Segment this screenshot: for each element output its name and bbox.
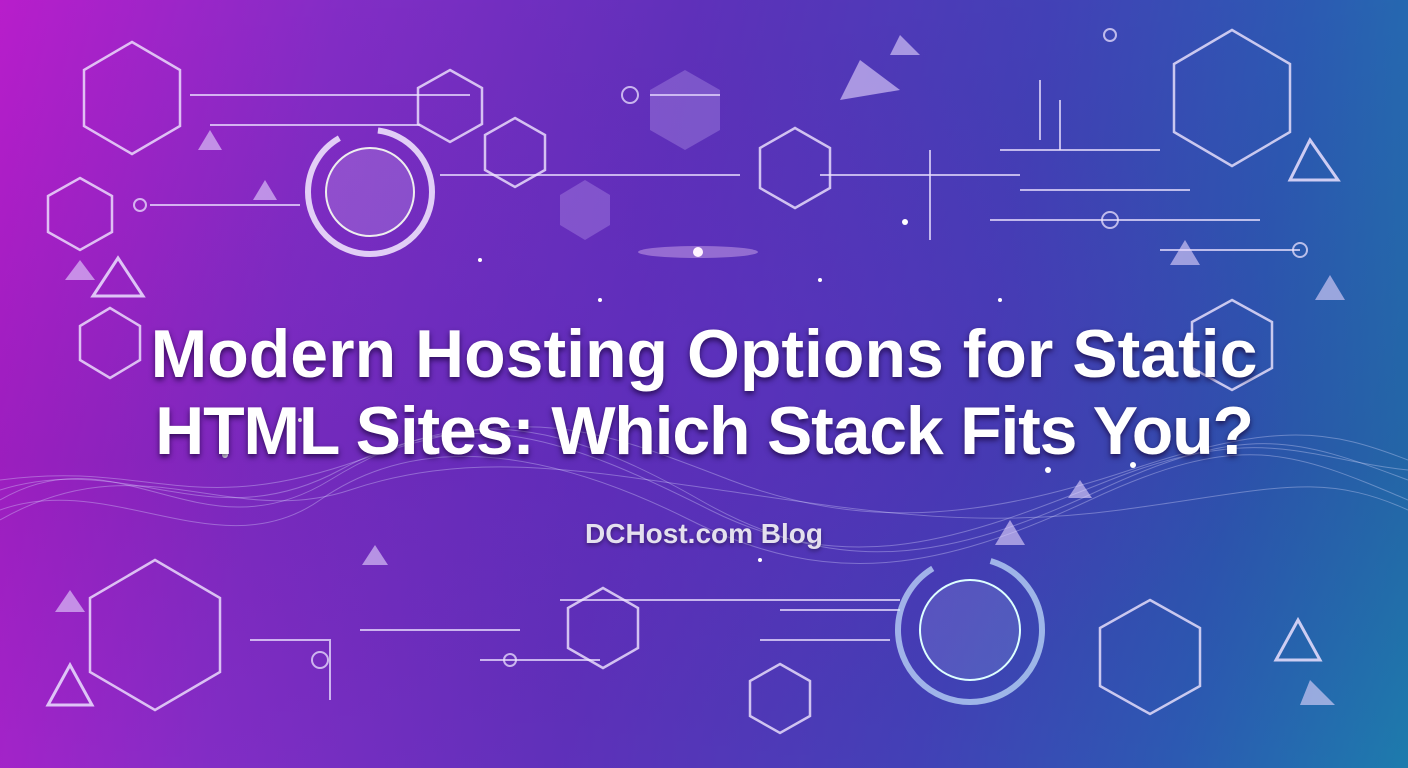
triangles: [55, 35, 1345, 705]
title: Modern Hosting Options for Static: [151, 316, 1257, 392]
circuit lines: [134, 29, 1307, 700]
wave band: [0, 427, 1408, 564]
title: [151, 316, 1258, 469]
rings: [308, 130, 1042, 702]
stars / glows: [222, 219, 1136, 562]
title: HTML Sites: Which Stack Fits You?: [155, 393, 1253, 469]
subtitle: DCHost.com Blog: [585, 518, 823, 549]
